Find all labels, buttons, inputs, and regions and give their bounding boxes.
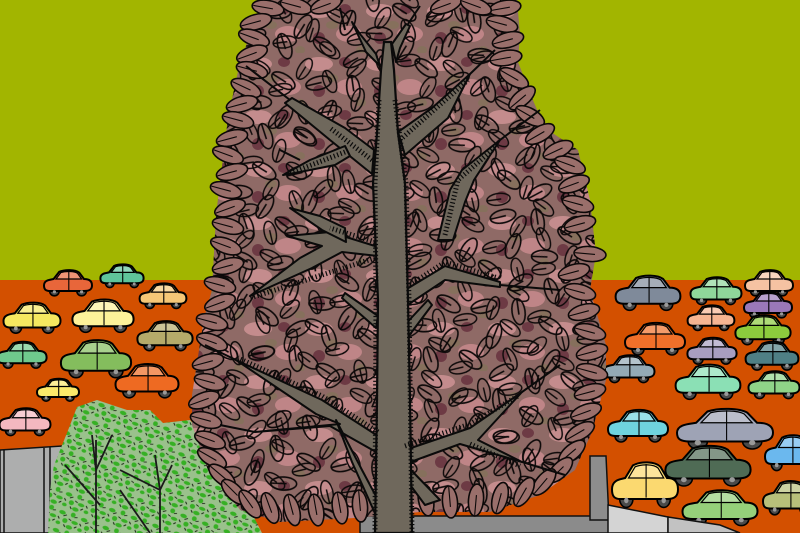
car	[137, 321, 193, 351]
sky	[0, 0, 800, 281]
orange ground	[0, 280, 800, 533]
car	[604, 355, 654, 383]
car	[676, 365, 740, 399]
car	[0, 408, 50, 436]
car	[745, 270, 793, 296]
branches	[205, 6, 565, 520]
van	[665, 446, 751, 486]
van	[612, 462, 678, 507]
right wall	[360, 456, 740, 533]
limousine	[677, 409, 773, 449]
car	[61, 340, 131, 378]
tree	[186, 0, 609, 533]
car	[116, 364, 178, 398]
trunk	[373, 42, 412, 533]
car	[746, 342, 798, 370]
car	[735, 315, 791, 345]
car	[3, 303, 60, 333]
car	[608, 410, 668, 442]
left wall	[0, 446, 62, 533]
car	[100, 264, 144, 288]
car	[37, 379, 79, 401]
traffic: left group of cars	[0, 264, 193, 436]
car	[688, 305, 734, 330]
car	[616, 276, 680, 310]
car	[748, 371, 800, 399]
truck	[625, 323, 685, 355]
car	[44, 270, 92, 296]
car	[687, 338, 737, 364]
traffic: right group of cars	[604, 270, 800, 526]
car	[690, 277, 742, 305]
car	[765, 435, 800, 471]
car	[140, 283, 186, 308]
car	[763, 481, 800, 515]
canopy edge leaves	[186, 0, 609, 527]
car	[682, 490, 758, 526]
canopy	[192, 0, 606, 522]
car	[72, 300, 134, 332]
bush branches	[65, 435, 172, 533]
car	[744, 292, 792, 318]
green bush	[48, 400, 262, 533]
car	[0, 342, 47, 368]
bark ticks	[238, 80, 520, 533]
